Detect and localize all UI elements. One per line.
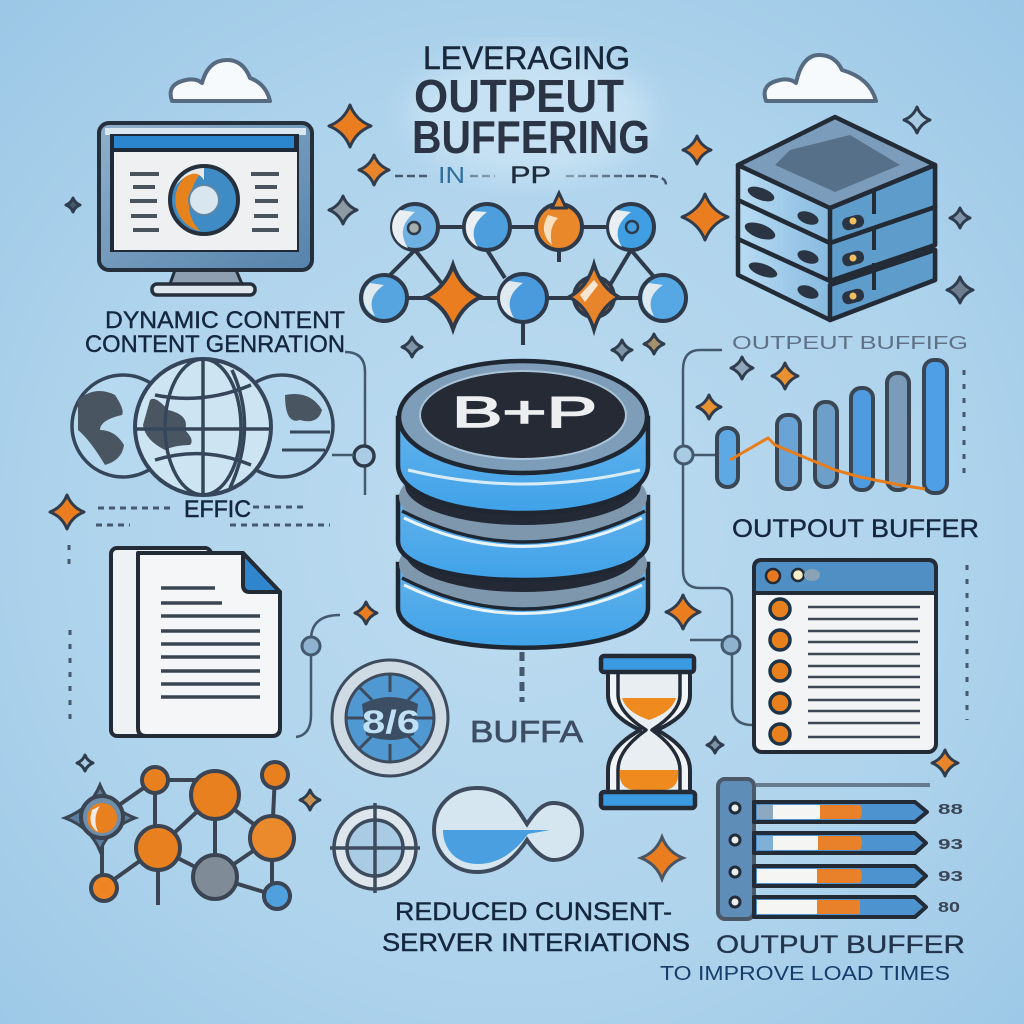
label: dynamic content bbox=[85, 307, 345, 358]
bar values: 93 bbox=[938, 836, 963, 853]
node bbox=[264, 883, 290, 909]
title bbox=[410, 40, 650, 189]
node bbox=[392, 204, 438, 250]
icon: infinity flask bbox=[434, 788, 582, 872]
panel dots bbox=[730, 803, 740, 907]
document lines bbox=[161, 588, 260, 697]
label: reduced client-server interactions: SERVER INTERIATIONS bbox=[382, 929, 690, 957]
node bbox=[640, 275, 686, 321]
gauge value: 8/6 bbox=[362, 704, 420, 740]
title: IN bbox=[438, 162, 465, 188]
node bbox=[193, 855, 237, 899]
bar values: 88 bbox=[938, 801, 963, 818]
label: buffer: BUFFA bbox=[470, 714, 583, 749]
label: output buffer to improve load times: TO IMPROVE LOAD TIMES bbox=[660, 963, 950, 985]
star node bbox=[425, 265, 481, 329]
icon: globes bbox=[72, 359, 333, 495]
node bbox=[262, 762, 288, 788]
gear node bbox=[65, 785, 135, 851]
node bbox=[142, 767, 168, 793]
network diagram: orange nodes bbox=[65, 762, 294, 909]
panel: progress bars bbox=[718, 779, 930, 919]
label: dynamic content: CONTENT GENRATION bbox=[85, 331, 345, 358]
node bbox=[91, 875, 117, 901]
label: output buffer to improve load times bbox=[660, 931, 965, 985]
donut chart on screen bbox=[170, 166, 238, 234]
label: output buffer: OUTPOUT BUFFER bbox=[732, 515, 979, 543]
node bbox=[499, 274, 547, 322]
connector lines bbox=[69, 176, 967, 737]
label: output buffer to improve load times: OUTPUT BUFFER bbox=[716, 931, 965, 959]
icon: decorative sparkles bbox=[50, 105, 973, 810]
icon: server stack bbox=[738, 117, 935, 320]
title: PP bbox=[510, 162, 551, 189]
bar values: 93 bbox=[938, 868, 963, 885]
node bbox=[250, 816, 294, 860]
title: OUTPEUT bbox=[414, 70, 624, 122]
node bbox=[361, 275, 407, 321]
star node bbox=[569, 264, 619, 330]
node bbox=[136, 826, 180, 870]
icon: right cloud bbox=[765, 55, 876, 101]
central label: B+P bbox=[452, 388, 597, 437]
bar 3 bbox=[754, 866, 926, 886]
icon: document bbox=[111, 548, 280, 736]
bar 1 bbox=[754, 802, 927, 822]
bar values: 80 bbox=[938, 899, 960, 916]
trend line bbox=[730, 438, 925, 489]
label: dynamic content: DYNAMIC CONTENT bbox=[105, 307, 345, 334]
label: reduced client-server interactions bbox=[382, 898, 690, 957]
bottom disk bbox=[398, 512, 648, 648]
icon: orange star bbox=[641, 837, 683, 879]
icon: hourglass bbox=[601, 656, 695, 808]
list bullets bbox=[770, 599, 790, 744]
title: BUFFERING bbox=[412, 111, 650, 163]
bar 4 bbox=[754, 897, 926, 917]
faded caption: OUTPEUT BUFFIFG bbox=[732, 333, 968, 353]
folded corner bbox=[243, 553, 280, 592]
title: LEVERAGING bbox=[423, 40, 630, 76]
node bbox=[191, 771, 239, 819]
icon: left cloud bbox=[171, 60, 270, 101]
top stroke bbox=[756, 783, 930, 787]
bar values bbox=[938, 801, 963, 916]
node bbox=[608, 204, 654, 250]
node bbox=[536, 193, 582, 250]
icon: target bbox=[330, 803, 420, 893]
node network: top bbox=[361, 193, 686, 345]
icon: percentage gauge bbox=[332, 660, 448, 776]
screen text lines bbox=[130, 174, 279, 230]
label: efficiency: EFFIC bbox=[184, 496, 251, 523]
window controls bbox=[766, 569, 820, 583]
top disk bbox=[398, 361, 648, 513]
bar 2 bbox=[754, 833, 926, 853]
panel: browser window list bbox=[754, 560, 936, 752]
icon: monitor bbox=[99, 123, 312, 295]
bar chart: output buffer bbox=[717, 360, 947, 493]
node bbox=[464, 204, 510, 250]
middle disk bbox=[398, 445, 648, 580]
label: reduced client-server interactions: REDUCED CUNSENT- bbox=[395, 898, 672, 926]
list lines bbox=[808, 607, 920, 737]
central database cylinder bbox=[398, 361, 648, 648]
